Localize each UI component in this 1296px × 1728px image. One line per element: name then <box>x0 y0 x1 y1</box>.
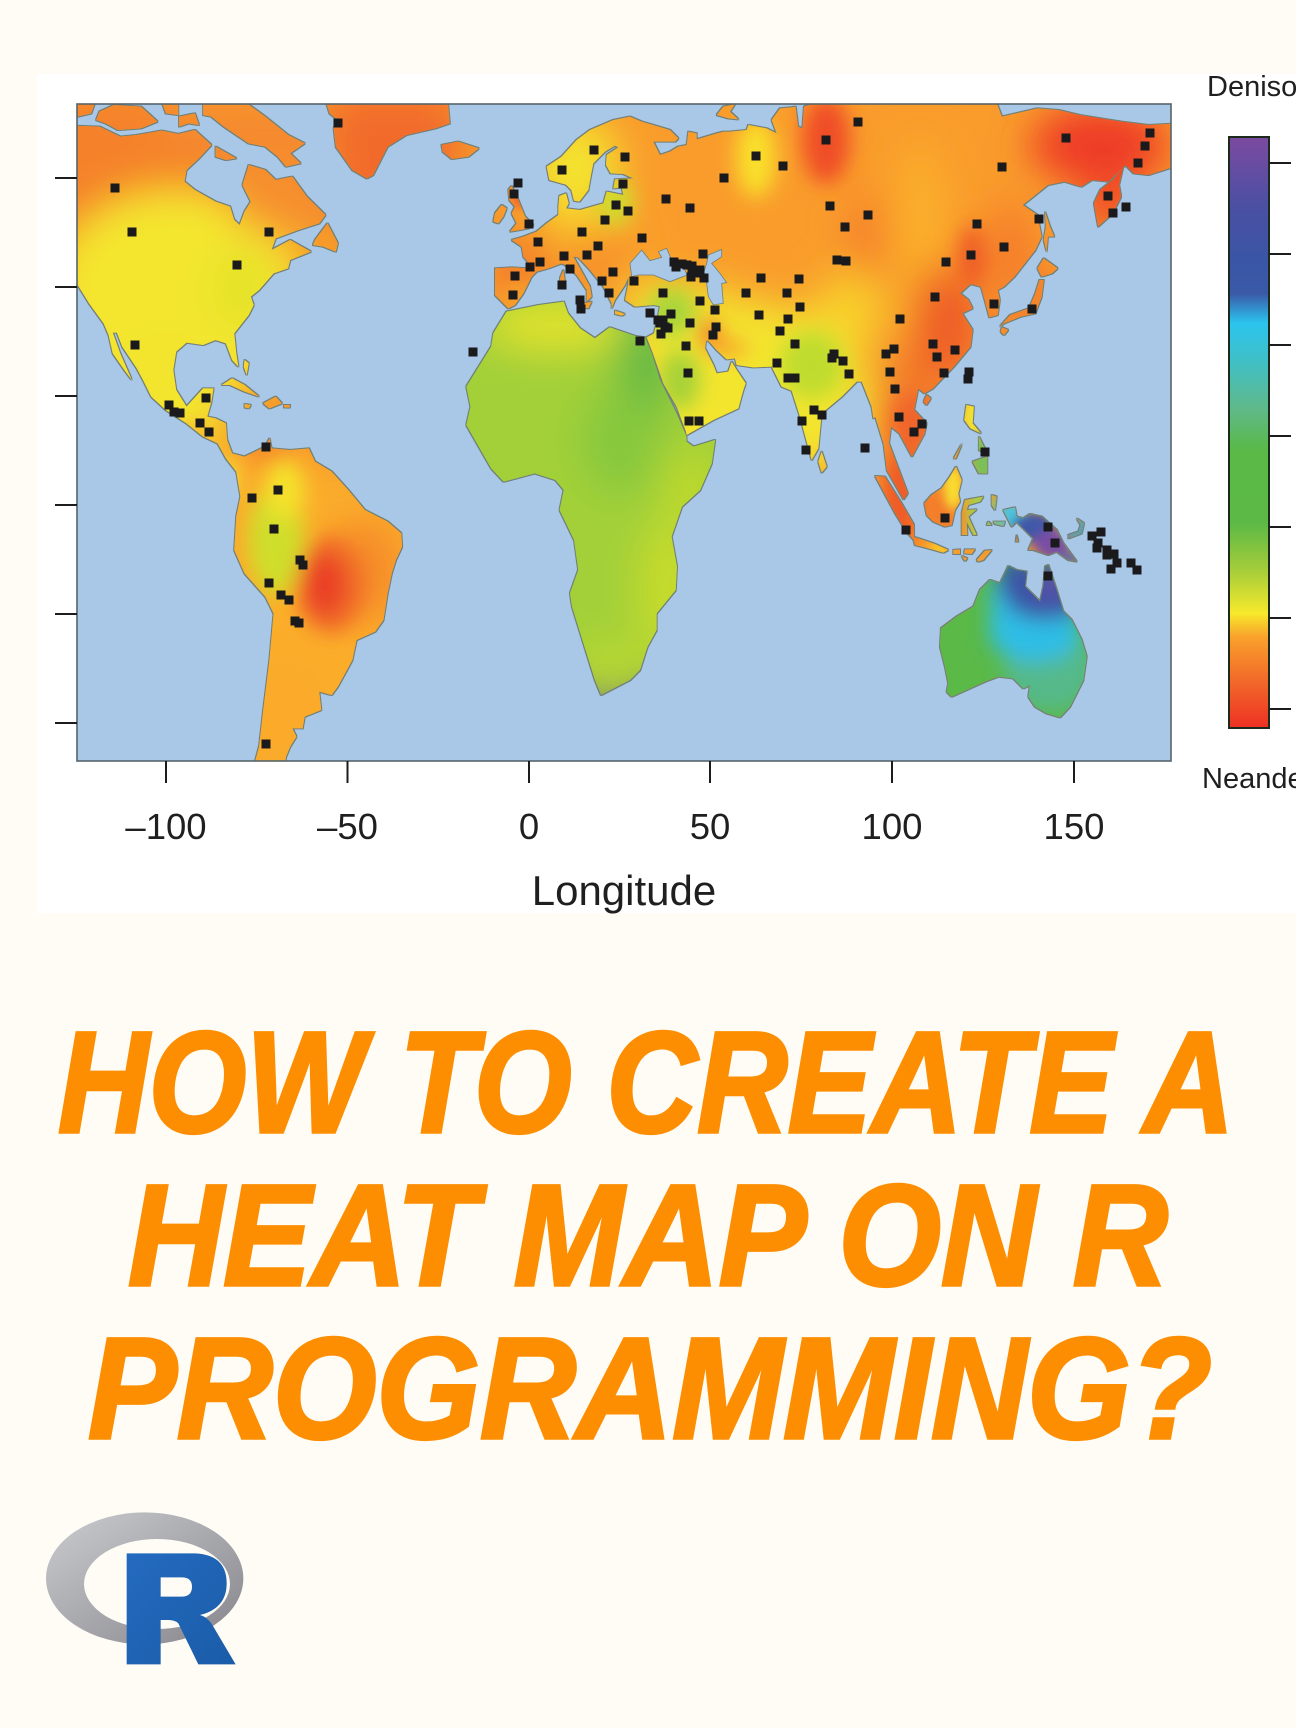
sample points <box>111 118 1154 748</box>
longitude axis labels: –100 <box>125 806 207 847</box>
latitude axis ticks <box>55 178 77 723</box>
title line 3: PROGRAMMING? <box>88 1308 1212 1469</box>
longitude axis labels: 150 <box>1044 806 1104 847</box>
longitude axis labels: –50 <box>317 806 378 847</box>
logo ring <box>46 1512 243 1644</box>
heat field: Australia <box>940 546 1087 718</box>
world heat map <box>78 104 1170 760</box>
land outline <box>70 100 1180 767</box>
map frame <box>77 104 1171 761</box>
axis title: Longitude <box>532 867 716 914</box>
longitude axis labels <box>125 806 1104 847</box>
longitude axis ticks <box>166 761 1074 783</box>
title <box>58 1002 1234 1469</box>
longitude axis labels: 50 <box>690 806 730 847</box>
longitude axis labels: 0 <box>519 806 539 847</box>
heat field: Americas, Eurasia and islands <box>78 104 1170 760</box>
logo letter R <box>127 1553 236 1664</box>
colour bar ticks <box>1269 163 1291 709</box>
colour legend <box>1202 71 1296 795</box>
heat field: New Guinea <box>993 501 1084 562</box>
inland seas <box>630 248 727 305</box>
icon: R logo <box>46 1512 243 1664</box>
longitude axis labels: 100 <box>862 806 922 847</box>
title line 2: HEAT MAP ON R <box>128 1155 1168 1316</box>
panel: heat map figure <box>0 71 1296 914</box>
heat field: Africa <box>466 302 716 695</box>
colour bar <box>1229 137 1269 728</box>
ocean <box>77 104 1171 761</box>
panel background <box>37 74 1296 913</box>
